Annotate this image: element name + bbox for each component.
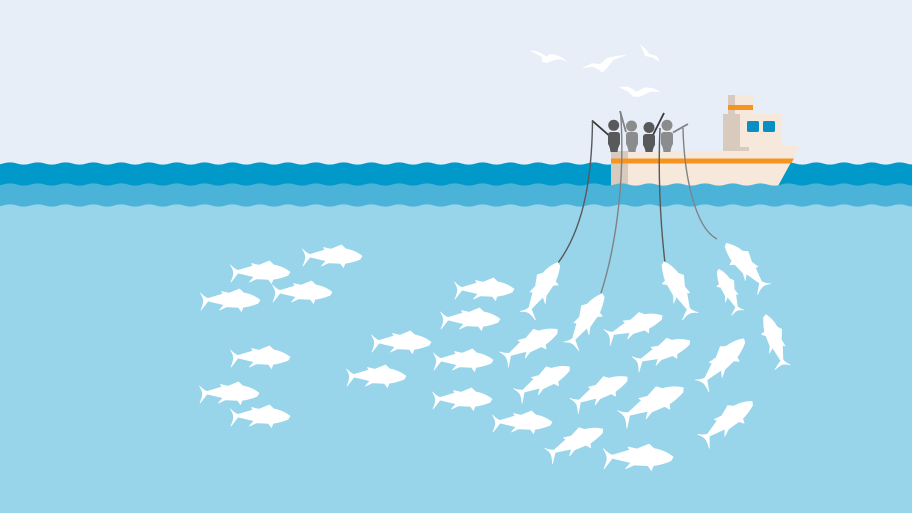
main cabin shadow	[723, 114, 749, 152]
fish	[346, 365, 406, 388]
fishing lines	[558, 112, 717, 293]
fish	[230, 405, 290, 428]
cabin window left	[747, 121, 759, 132]
fish	[432, 388, 492, 410]
fish	[440, 308, 500, 330]
fish hooked on line 1	[517, 257, 568, 321]
school of tuna	[200, 236, 794, 470]
fishing line 3	[659, 128, 665, 263]
fish	[603, 444, 673, 470]
fish	[512, 357, 575, 405]
fish	[200, 382, 259, 404]
fish	[711, 266, 747, 316]
fish	[631, 331, 694, 374]
fishing line 2	[601, 112, 622, 293]
hull	[611, 146, 800, 186]
upper cabin	[728, 95, 753, 115]
fish	[498, 319, 563, 369]
main cabin	[740, 114, 781, 152]
fish	[692, 331, 753, 393]
fish	[756, 311, 794, 370]
sky background	[0, 0, 912, 200]
fish hooked on line 3	[654, 257, 702, 321]
hull orange stripe	[611, 158, 794, 164]
fish	[372, 331, 431, 354]
fish	[603, 305, 666, 347]
back wave band	[0, 162, 912, 471]
fish	[568, 367, 633, 415]
fish	[302, 245, 362, 268]
upper cabin shadow	[728, 95, 735, 115]
fishing line 1	[558, 121, 592, 263]
fish	[200, 289, 260, 312]
fishing line 4	[683, 128, 717, 239]
fisherman 2 with rod	[620, 111, 638, 152]
fish	[492, 411, 552, 434]
fish	[230, 346, 290, 368]
fish	[434, 349, 493, 372]
fish	[454, 278, 514, 300]
cabin window right	[763, 121, 775, 132]
fish	[616, 376, 689, 430]
stern shadow	[611, 151, 628, 186]
funnel stripe	[728, 105, 753, 110]
fish hooked on line 4	[718, 236, 774, 296]
fish	[230, 261, 290, 284]
seagull 4	[618, 87, 661, 97]
middle wave band	[0, 183, 912, 492]
fish hooked on line 2	[560, 288, 612, 352]
fisherman 3 with rod	[643, 113, 664, 152]
fishing boat	[611, 95, 800, 186]
seagull 1	[530, 51, 568, 63]
seagull 2	[582, 55, 627, 73]
main water	[0, 204, 912, 513]
fish	[272, 281, 332, 304]
fisherman 1 with rod	[592, 120, 620, 152]
fish	[543, 419, 608, 465]
fish	[695, 392, 760, 450]
fisherman 4 with rod	[661, 120, 688, 152]
seagull 3	[640, 44, 660, 62]
seagulls	[530, 44, 661, 97]
